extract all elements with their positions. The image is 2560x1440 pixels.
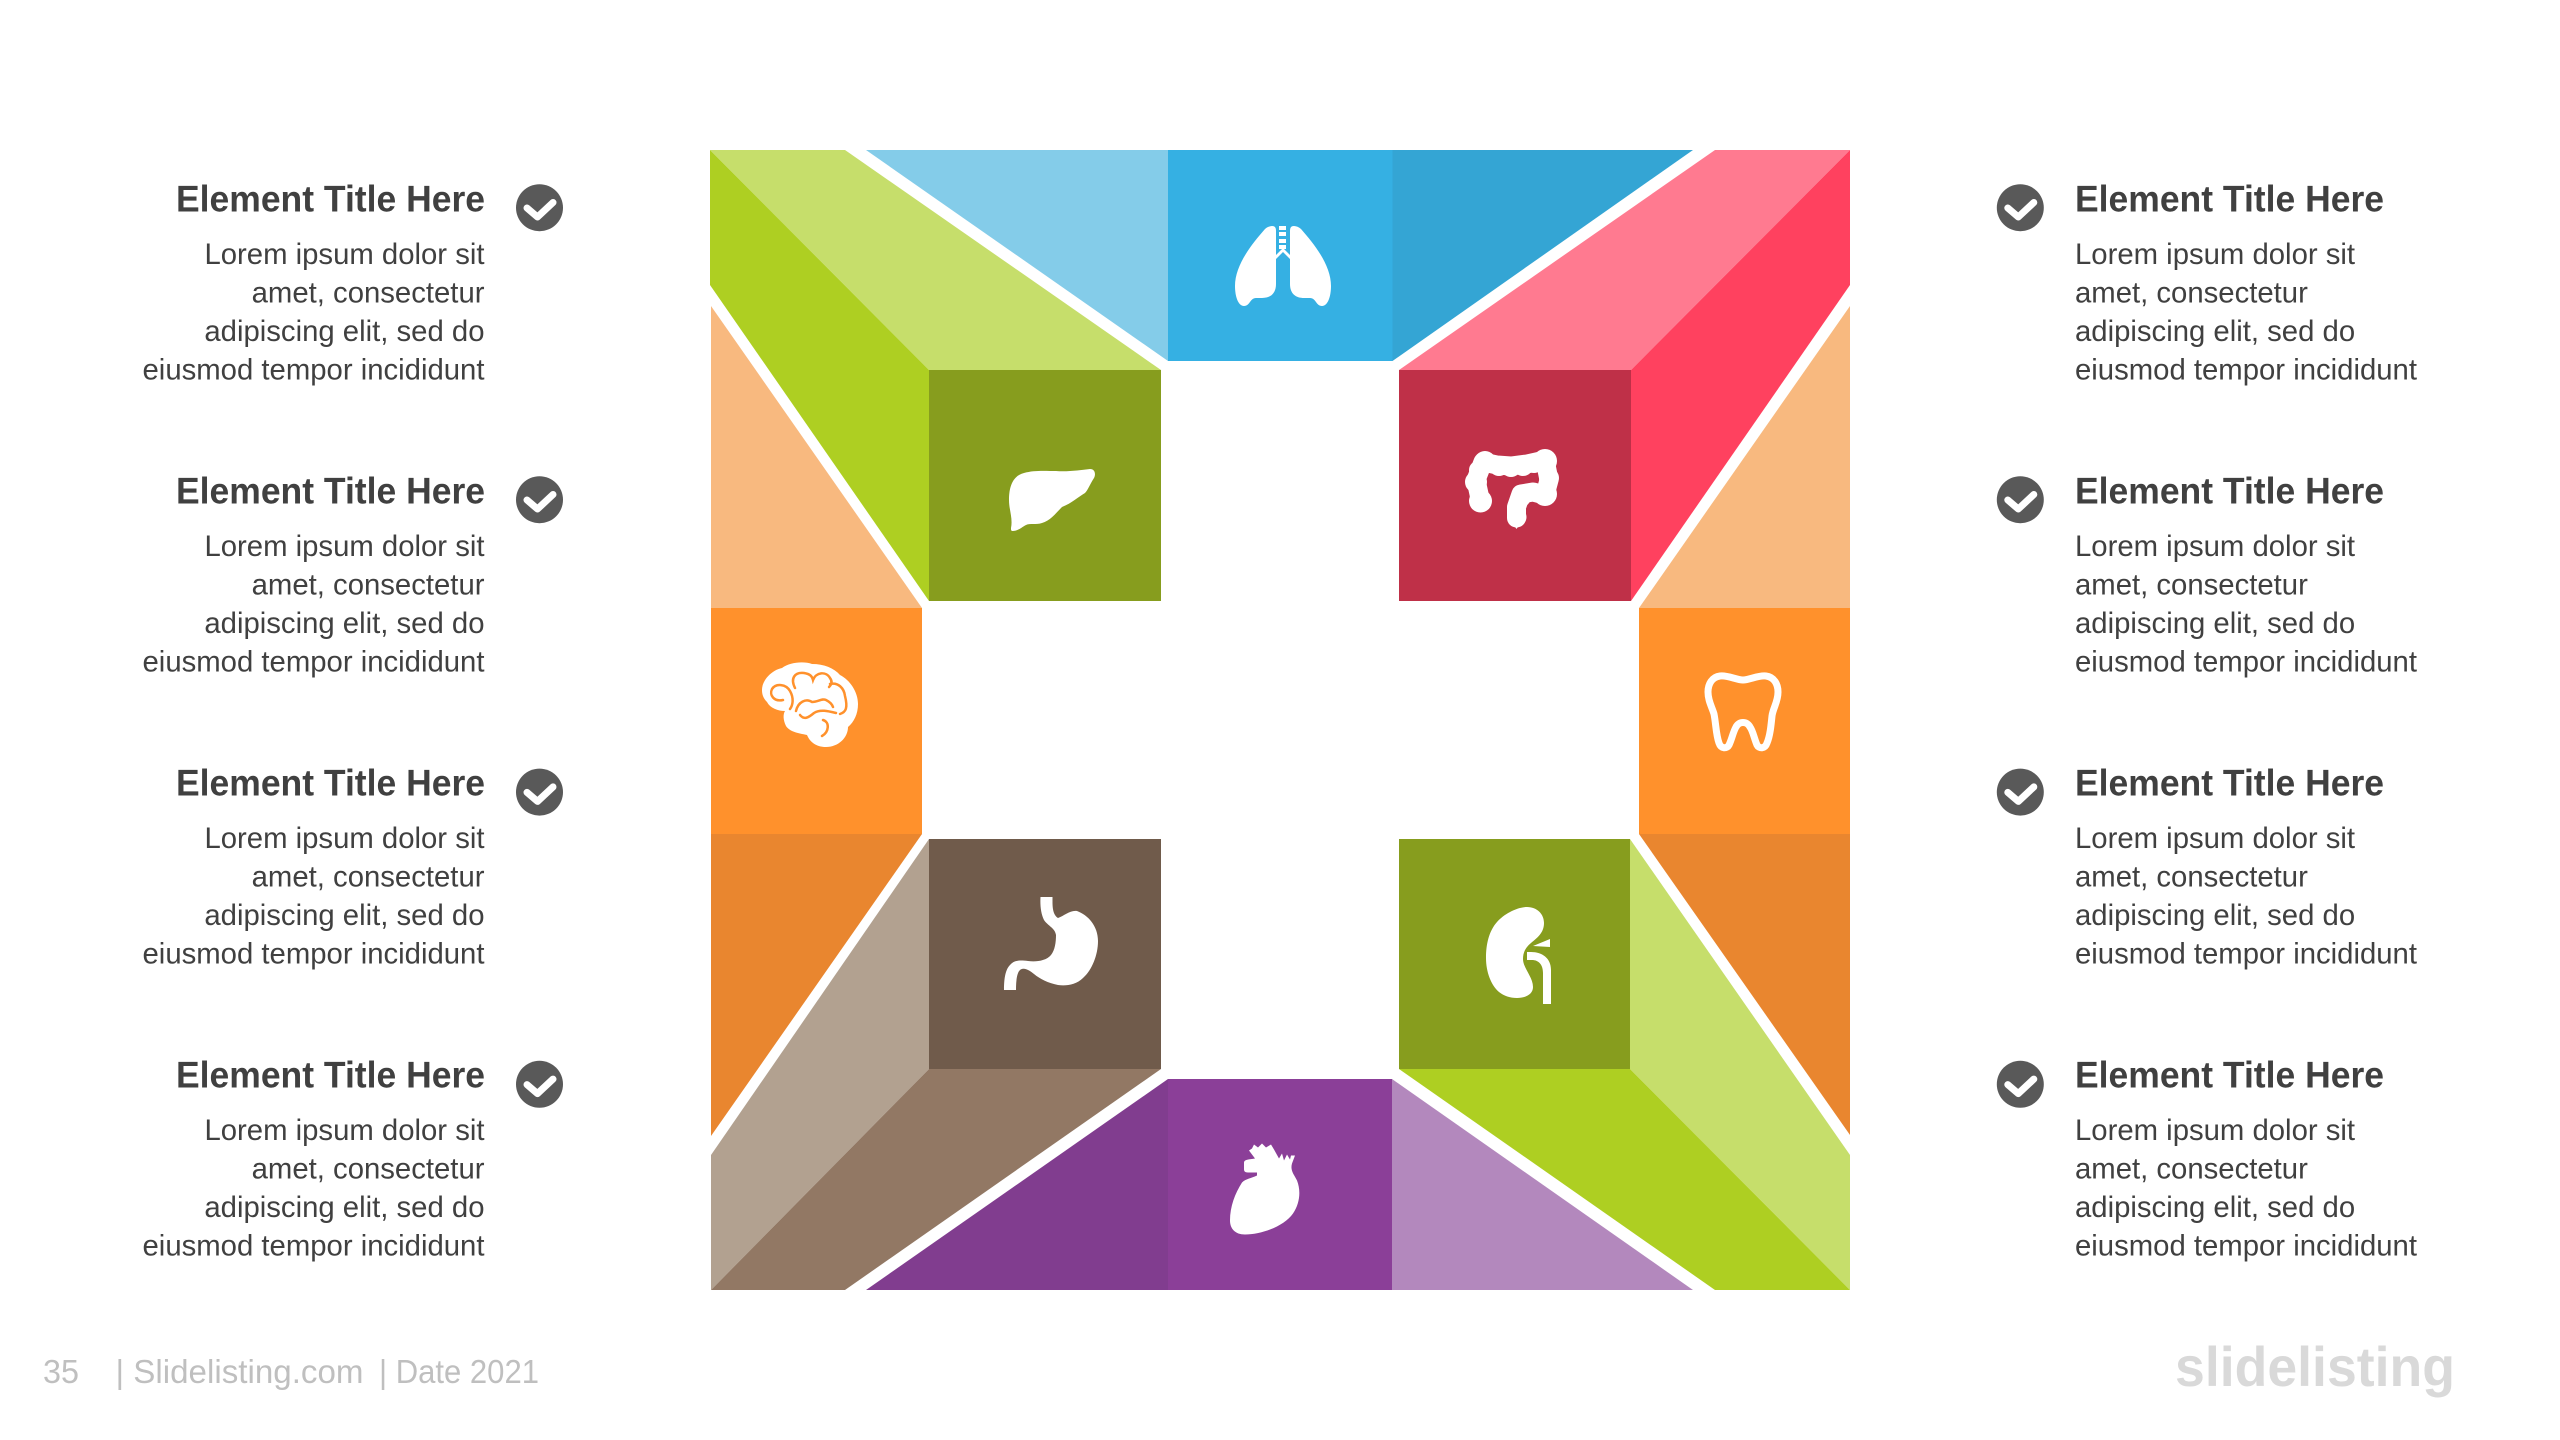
- icon: tooth: [1708, 676, 1778, 748]
- panel: lungs top section: [866, 150, 1693, 361]
- text block: right item 2: Element Title Here: [2075, 470, 2384, 512]
- text block: left item 4: Lorem ipsum dolor sit: [204, 1114, 484, 1147]
- icon: check badge left 2: [516, 476, 563, 523]
- text block: left item 4: adipiscing elit, sed do: [204, 1191, 484, 1224]
- icon: liver: [1009, 469, 1095, 531]
- text block: right item 4: Element Title Here: [2075, 1054, 2384, 1096]
- text block: left item 3: Lorem ipsum dolor sit: [204, 822, 484, 855]
- text block: right item 2: [2075, 470, 2417, 678]
- footer: page number and site info: | Date 2021: [379, 1353, 539, 1390]
- text block: left item 1: adipiscing elit, sed do: [204, 315, 484, 348]
- icon: lungs: [1235, 226, 1331, 306]
- text block: right item 3: Element Title Here: [2075, 762, 2384, 804]
- text block: right item 1: Lorem ipsum dolor sit: [2075, 238, 2355, 271]
- icon: check badge left 3: [516, 769, 563, 816]
- text block: left item 1: Lorem ipsum dolor sit: [204, 238, 484, 271]
- panel: heart bottom section: [866, 1079, 1693, 1290]
- text block: right item 2: adipiscing elit, sed do: [2075, 607, 2355, 640]
- text block: right item 1: adipiscing elit, sed do: [2075, 315, 2355, 348]
- icon: check badge right 1: [1997, 184, 2044, 231]
- text block: right item 1: Element Title Here: [2075, 178, 2384, 220]
- panel: left column items: [143, 178, 563, 1262]
- text block: left item 4: eiusmod tempor incididunt: [143, 1229, 484, 1262]
- text block: left item 2: eiusmod tempor incididunt: [143, 645, 484, 678]
- text block: right item 3: amet, consectetur: [2075, 861, 2308, 894]
- icon: heart: [1230, 1144, 1299, 1234]
- icon: kidney: [1486, 907, 1551, 1004]
- footer: page number and site info: 35: [43, 1353, 79, 1390]
- panel: liver top-left section: [710, 150, 1161, 601]
- text block: left item 1: eiusmod tempor incididunt: [143, 353, 484, 386]
- icon: check badge left 4: [516, 1061, 563, 1108]
- text block: right item 4: [2075, 1054, 2417, 1262]
- text block: right item 2: Lorem ipsum dolor sit: [2075, 530, 2355, 563]
- text block: right item 3: adipiscing elit, sed do: [2075, 899, 2355, 932]
- text block: left item 4: amet, consectetur: [252, 1153, 485, 1186]
- text block: left item 3: adipiscing elit, sed do: [204, 899, 484, 932]
- text block: right item 4: amet, consectetur: [2075, 1153, 2308, 1186]
- text block: left item 4: Element Title Here: [176, 1054, 485, 1096]
- text block: left item 1: Element Title Here: [176, 178, 485, 220]
- text block: right item 3: eiusmod tempor incididunt: [2075, 937, 2417, 970]
- icon: check badge right 2: [1997, 476, 2044, 523]
- text block: left item 3: eiusmod tempor incididunt: [143, 937, 484, 970]
- text block: right item 1: [2075, 178, 2417, 386]
- footer: page number and site info: [43, 1353, 539, 1390]
- text block: left item 1: amet, consectetur: [252, 277, 485, 310]
- text block: left item 2: amet, consectetur: [252, 569, 485, 602]
- icon: colon: [1465, 449, 1559, 529]
- panel: tooth right section: [1639, 306, 1850, 1135]
- text block: left item 4: [143, 1054, 485, 1262]
- icon: check badge right 3: [1997, 769, 2044, 816]
- text block: left item 3: [143, 762, 485, 970]
- text block: right item 2: eiusmod tempor incididunt: [2075, 645, 2417, 678]
- text block: left item 2: Lorem ipsum dolor sit: [204, 530, 484, 563]
- text block: left item 3: amet, consectetur: [252, 861, 485, 894]
- text block: right item 3: [2075, 762, 2417, 970]
- text block: left item 2: Element Title Here: [176, 470, 485, 512]
- footer: page number and site info: | Slidelisting.com: [116, 1353, 364, 1390]
- text block: left item 1: [143, 178, 485, 386]
- text block: right item 3: Lorem ipsum dolor sit: [2075, 822, 2355, 855]
- text block: left item 2: [143, 470, 485, 678]
- icon: check badge right 4: [1997, 1061, 2044, 1108]
- text block: right item 4: eiusmod tempor incididunt: [2075, 1229, 2417, 1262]
- text block: right item 4: adipiscing elit, sed do: [2075, 1191, 2355, 1224]
- icon: check badge left 1: [516, 184, 563, 231]
- panel: central organ diagram: [710, 150, 1850, 1290]
- panel: right column items: [1997, 178, 2417, 1262]
- text block: right item 1: amet, consectetur: [2075, 277, 2308, 310]
- panel: kidney bottom-right section: [1399, 839, 1850, 1290]
- icon: brain: [762, 662, 858, 747]
- text block: left item 3: Element Title Here: [176, 762, 485, 804]
- text block: left item 2: adipiscing elit, sed do: [204, 607, 484, 640]
- panel: brain left section: [711, 306, 922, 1136]
- logo: slidelisting wordmark: slidelisting: [2175, 1335, 2455, 1398]
- panel: colon top-right section: [1399, 150, 1850, 601]
- text block: right item 1: eiusmod tempor incididunt: [2075, 353, 2417, 386]
- panel: stomach bottom-left section: [711, 839, 1161, 1290]
- icon: stomach: [1004, 897, 1098, 990]
- text block: right item 4: Lorem ipsum dolor sit: [2075, 1114, 2355, 1147]
- text block: right item 2: amet, consectetur: [2075, 569, 2308, 602]
